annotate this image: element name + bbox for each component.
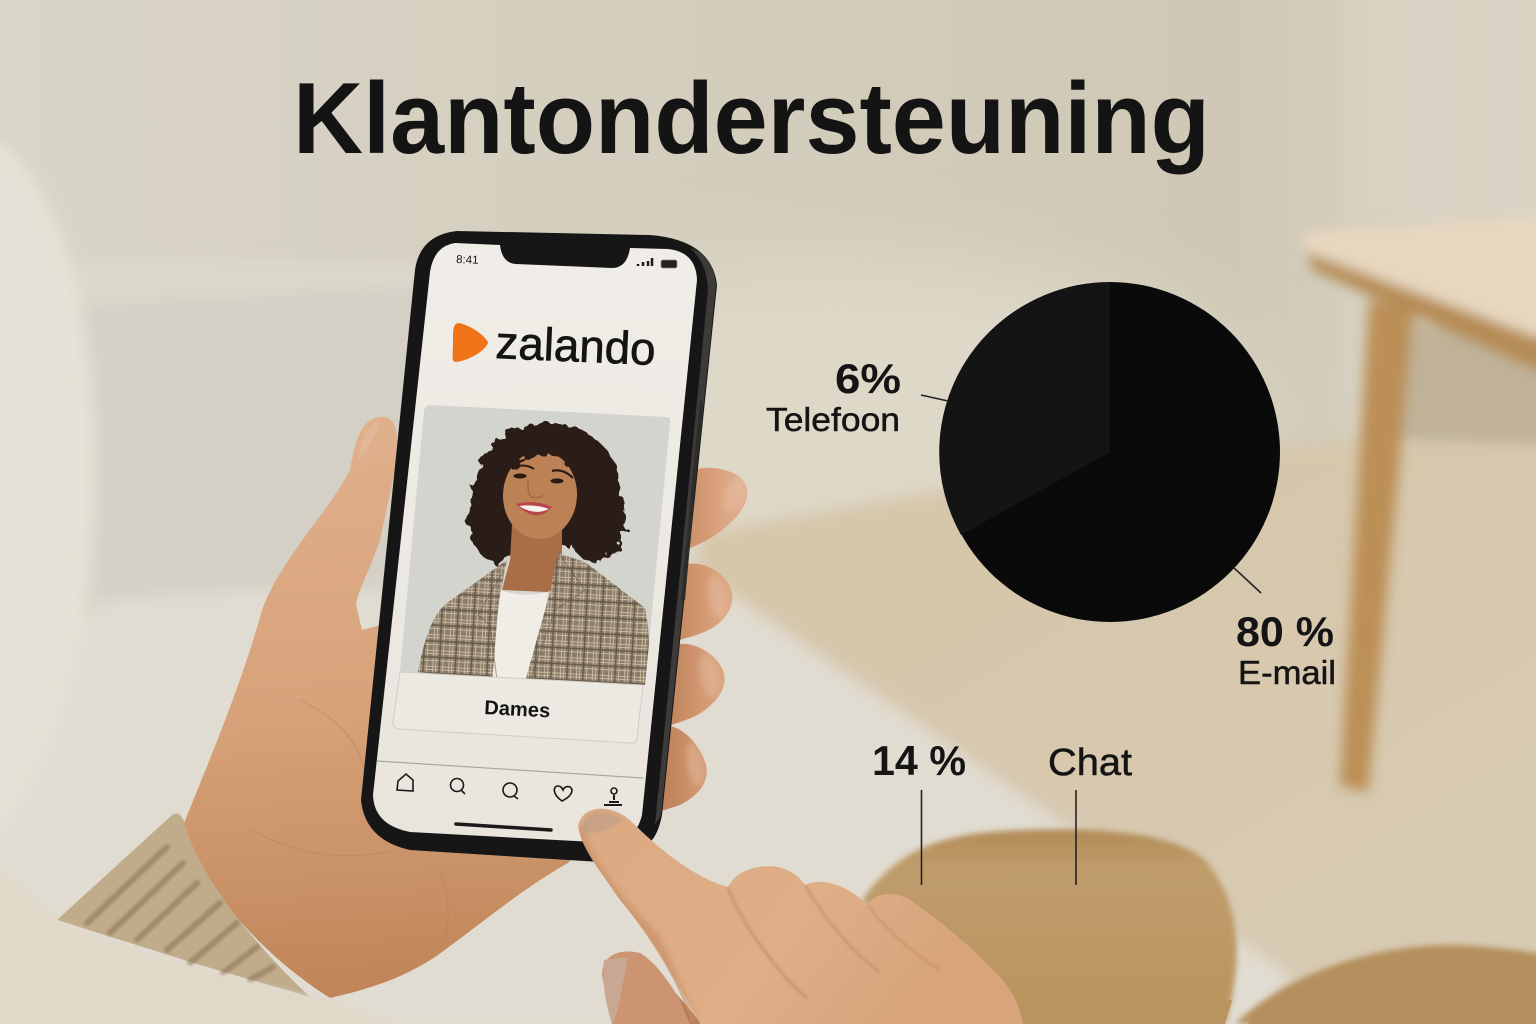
- pie chart: [939, 282, 1280, 622]
- product card: [393, 672, 643, 743]
- phone body: [361, 231, 717, 862]
- title: Klantondersteuning: [293, 63, 1210, 175]
- logo: zalando: zalando: [495, 316, 657, 375]
- icon: search: [450, 778, 465, 794]
- table: [1304, 205, 1536, 792]
- finger creases and shading: [578, 830, 940, 1024]
- sofa seat: [0, 590, 1290, 1024]
- phone screen: [373, 243, 697, 843]
- lapels: [478, 553, 585, 680]
- sleeve: [0, 850, 400, 1024]
- callout: 80% E-mail: [1233, 567, 1336, 691]
- finger nails: [683, 475, 748, 787]
- status bar: 8:41: [456, 254, 479, 267]
- product card: Dames: [484, 697, 551, 722]
- icon: home: [397, 774, 413, 791]
- bottom navigation icons: [397, 774, 622, 805]
- icon: profile: [604, 788, 622, 805]
- floor: [700, 430, 1536, 1024]
- hair: [468, 423, 625, 563]
- pie slice: lighter segment: [939, 283, 1110, 535]
- fingers and hand: [578, 809, 1023, 1024]
- left hand holding phone: [183, 417, 748, 998]
- fringe: [511, 451, 568, 470]
- phone: [361, 231, 717, 862]
- sofa back: [70, 275, 430, 640]
- trousers: [862, 829, 1536, 1024]
- home indicator: [456, 824, 551, 830]
- callout: Chat: Chat: [1048, 742, 1132, 784]
- status bar: [456, 254, 677, 268]
- thumb: [602, 951, 702, 1024]
- callout: 6% Telefoon: Telefoon: [766, 401, 900, 438]
- blazer: [418, 553, 649, 690]
- finger nail: [580, 812, 622, 833]
- shirt: [492, 590, 548, 680]
- callout: 6% Telefoon: 6%: [835, 355, 901, 402]
- callout: 80% E-mail: 80 %: [1236, 608, 1334, 655]
- icon: heart: [554, 786, 572, 801]
- cushion: [0, 130, 96, 900]
- neck: [502, 525, 562, 592]
- callout: 14%: 14 %: [872, 737, 966, 784]
- icon: search 2: [503, 783, 518, 799]
- callout: 80% E-mail: E-mail: [1238, 654, 1336, 691]
- wall corner: [1340, 0, 1362, 430]
- right hand pointing at phone: [578, 809, 1023, 1024]
- callout: 6% Telefoon: [766, 355, 948, 438]
- face: [503, 454, 577, 539]
- sweater cuff: [57, 814, 310, 997]
- product photo: woman in plaid blazer: [395, 400, 680, 690]
- fingers behind phone: [655, 468, 747, 813]
